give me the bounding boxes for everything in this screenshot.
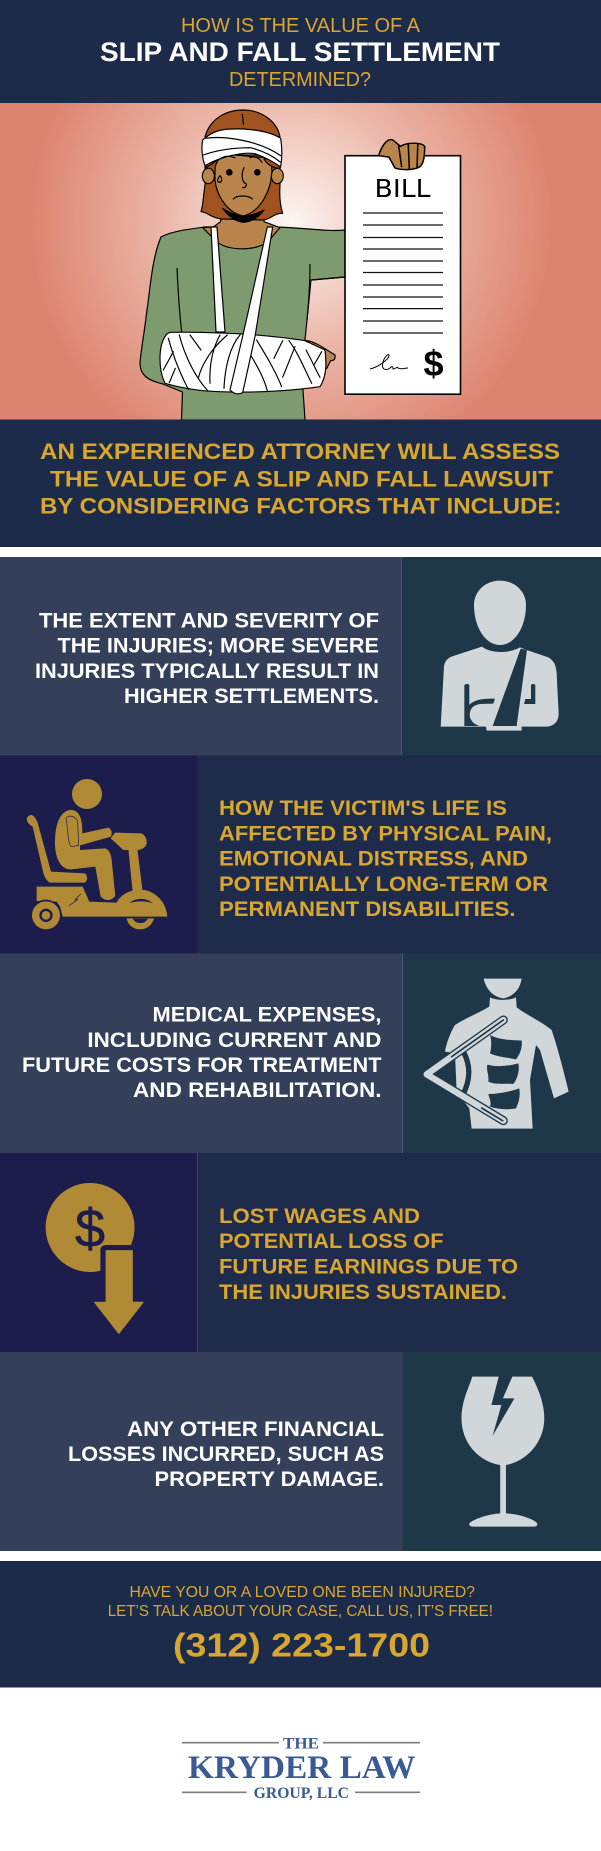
lost wages text: LOST WAGES AND bbox=[219, 1205, 420, 1228]
bill title: BILL bbox=[374, 174, 431, 203]
panel: medical expenses bbox=[0, 954, 601, 1153]
other losses text: LOSSES INCURRED, SUCH AS bbox=[68, 1443, 384, 1466]
lost wages text: THE INJURIES SUSTAINED. bbox=[219, 1281, 507, 1304]
life impact text: PERMANENT DISABILITIES. bbox=[219, 898, 516, 921]
illustration: bill document bbox=[345, 140, 460, 394]
logo: The Kryder Law Group: KRYDER LAW bbox=[188, 1750, 416, 1786]
dollar sign: $ bbox=[75, 1199, 105, 1259]
life impact text: HOW THE VICTIM'S LIFE IS bbox=[219, 797, 507, 820]
bill line items bbox=[363, 213, 443, 333]
bill hand bbox=[379, 140, 425, 170]
life impact text bbox=[219, 797, 552, 921]
bill dollar sign: $ bbox=[423, 343, 444, 384]
life impact text: AFFECTED BY PHYSICAL PAIN, bbox=[219, 822, 552, 845]
other losses text: PROPERTY DAMAGE. bbox=[154, 1468, 384, 1491]
illustration: woman head bbox=[201, 110, 283, 249]
medical text: FUTURE COSTS FOR TREATMENT bbox=[22, 1054, 382, 1077]
bill signature bbox=[370, 355, 408, 370]
lost wages text bbox=[219, 1205, 518, 1304]
logo: The Kryder Law Group: THE bbox=[283, 1736, 319, 1753]
lost wages text: FUTURE EARNINGS DUE TO bbox=[219, 1256, 518, 1279]
cta line 2: LET’S TALK ABOUT YOUR CASE, CALL US, IT’S FREE! bbox=[108, 1603, 493, 1620]
call to action band bbox=[0, 1561, 601, 1688]
icon: broken wine glass bbox=[461, 1375, 544, 1527]
intro line 3: BY CONSIDERING FACTORS THAT INCLUDE: bbox=[40, 494, 562, 519]
injury text bbox=[35, 609, 379, 708]
icon: torso with spine brace bbox=[427, 979, 569, 1129]
logo: The Kryder Law Group: GROUP, LLC bbox=[254, 1785, 349, 1802]
panel: lost wages bbox=[0, 1153, 601, 1352]
illustration: arm sling strap left bbox=[211, 227, 225, 332]
medical text: AND REHABILITATION. bbox=[133, 1079, 382, 1102]
panel: life impact bbox=[0, 756, 601, 954]
illustration: injured woman body bbox=[140, 227, 345, 420]
injury text: THE EXTENT AND SEVERITY OF bbox=[39, 609, 379, 632]
medical text bbox=[22, 1004, 382, 1102]
icon: coin with down arrow bbox=[46, 1183, 143, 1333]
life impact text: EMOTIONAL DISTRESS, AND bbox=[219, 848, 528, 871]
title line 1: HOW IS THE VALUE OF A bbox=[181, 15, 421, 37]
hero illustration panel bbox=[0, 103, 601, 420]
cta line 1: HAVE YOU OR A LOVED ONE BEEN INJURED? bbox=[130, 1584, 475, 1601]
title line 2: SLIP AND FALL SETTLEMENT bbox=[100, 37, 501, 67]
medical text: MEDICAL EXPENSES, bbox=[152, 1004, 382, 1027]
panel: other financial losses bbox=[0, 1352, 601, 1551]
illustration: arm cast bbox=[160, 227, 335, 394]
intro line 2: THE VALUE OF A SLIP AND FALL LAWSUIT bbox=[50, 466, 553, 492]
intro line 1: AN EXPERIENCED ATTORNEY WILL ASSESS bbox=[40, 439, 560, 464]
injury text: HIGHER SETTLEMENTS. bbox=[124, 685, 379, 708]
injury text: THE INJURIES; MORE SEVERE bbox=[58, 634, 379, 658]
panel: injury severity bbox=[0, 557, 601, 756]
lost wages text: POTENTIAL LOSS OF bbox=[219, 1230, 444, 1253]
other losses text bbox=[68, 1418, 384, 1491]
injury text: INJURIES TYPICALLY RESULT IN bbox=[35, 660, 379, 683]
life impact text: POTENTIALLY LONG-TERM OR bbox=[219, 873, 548, 896]
icon: person on mobility scooter bbox=[27, 779, 167, 931]
title line 3: DETERMINED? bbox=[229, 69, 371, 91]
other losses text: ANY OTHER FINANCIAL bbox=[127, 1418, 384, 1441]
icon: person with arm sling bbox=[441, 581, 559, 731]
intro heading band bbox=[0, 420, 601, 547]
header band bbox=[0, 0, 601, 103]
phone number: (312) 223-1700 bbox=[173, 1627, 430, 1664]
medical text: INCLUDING CURRENT AND bbox=[87, 1029, 381, 1052]
logo: The Kryder Law Group bbox=[182, 1736, 420, 1802]
